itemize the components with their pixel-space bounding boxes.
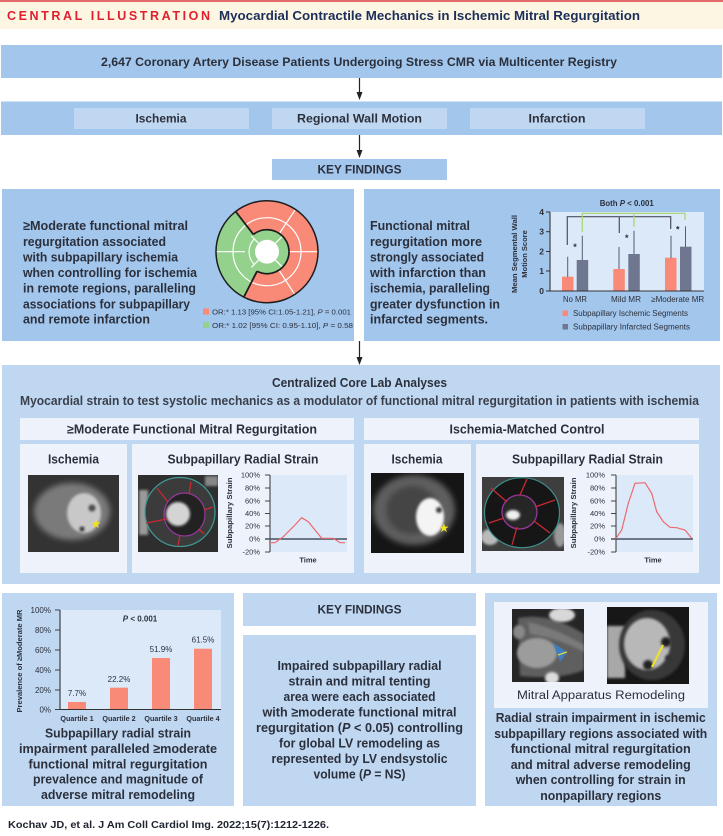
group heading: moderate MR: [20, 418, 354, 440]
legend: odds ratios: OR:* 1.02 [95% CI: 0.95-1.10], P = 0.58: [212, 323, 353, 330]
text block: tenting area: [256, 658, 463, 781]
chart: prevalence bars: 51.9%: [150, 645, 172, 654]
image: long-axis scan with tenting area: [512, 608, 584, 684]
group heading: matched control: [364, 418, 699, 440]
chart: prevalence bars: 0%: [39, 706, 51, 714]
image: strain contours: [481, 477, 566, 551]
text block: infarction finding: ischemia, paralleling: [370, 281, 490, 296]
text block: tenting area: for global LV remodeling as: [279, 735, 440, 750]
chart: wall motion score bars: [510, 199, 704, 304]
text block: infarction finding: [369, 218, 500, 326]
key findings heading: [272, 159, 447, 180]
text block: strain impairment: Subpapillary radial strain: [45, 726, 191, 741]
text block: tenting area: Impaired subpapillary radial: [278, 658, 442, 673]
chart: strain curve, control: Subpapillary Strain: [569, 477, 578, 548]
chart: prevalence bars: P < 0.001: [123, 614, 158, 624]
chart: strain curve, control: [569, 470, 693, 564]
chart: prevalence bars: 60%: [35, 646, 51, 655]
icon: yellow star: ★: [439, 521, 449, 535]
text block: radial strain impairment: functional mitral regurgitation: [511, 741, 691, 756]
text block: radial strain impairment: and mitral adverse remodeling: [511, 757, 691, 772]
chart: wall motion score bars: 0: [539, 286, 544, 296]
measures band: [1, 102, 722, 135]
icon: yellow star: ★: [91, 517, 101, 531]
chart: strain curve, moderate MR: 60%: [245, 496, 260, 506]
image: strain contours: [138, 475, 218, 552]
chart: prevalence bars: 7.7%: [68, 689, 86, 698]
chart: prevalence bars: [15, 606, 221, 723]
chart: wall motion score bars: 2: [539, 246, 544, 256]
panel: mitral apparatus remodeling: [485, 593, 717, 806]
text block: subpapillary ischemia finding: ≥Moderate functional mitral: [23, 218, 188, 233]
text block: subpapillary ischemia finding: [22, 218, 198, 326]
text block: subpapillary ischemia finding: with subpapillary ischemia: [22, 250, 179, 265]
chart: bullseye plot: [216, 201, 318, 303]
text block: radial strain impairment: Radial strain impairment in ischemic: [496, 710, 706, 725]
chart: wall motion score bars: 4: [539, 207, 544, 217]
chart: prevalence bars: Quartile 2: [102, 714, 136, 723]
chart: strain curve, control: 20%: [590, 522, 605, 530]
legend: odds ratios: OR:* 1.13 [95% CI:1.05-1.21], P = 0.001: [212, 310, 351, 316]
chart: strain curve, moderate MR: 40%: [245, 509, 260, 518]
chart: strain curve, moderate MR: 80%: [245, 484, 260, 492]
chart: prevalence bars: 61.5%: [192, 636, 214, 644]
panel: tenting area finding: [243, 635, 476, 806]
chart: strain curve, moderate MR: Subpapillary Strain: [225, 477, 234, 548]
chart: wall motion score bars: No MR: [563, 295, 587, 304]
chart: wall motion score bars: *: [573, 242, 577, 252]
text block: radial strain impairment: when controlling for strain in: [515, 772, 686, 787]
chart: strain curve, control: 60%: [590, 496, 605, 506]
text block: strain impairment: adverse mitral remodeling: [41, 787, 195, 802]
chart: strain curve, control: 40%: [590, 509, 605, 518]
legend: odds ratios: [203, 308, 353, 330]
card: strain, control: [476, 444, 699, 573]
text block: subpapillary ischemia finding: and remote infarction: [23, 311, 150, 326]
text block: tenting area: volume (P = NS): [314, 766, 406, 781]
chart: wall motion score bars: Mean Segmental Wall: [510, 215, 519, 293]
measure: ischemia: Ischemia: [136, 112, 187, 126]
heading: second key findings: [243, 593, 476, 626]
text block: infarction finding: strongly associated: [370, 250, 484, 265]
chart: wall motion score bars: 3: [539, 226, 544, 236]
text block: infarction finding: with infarction than: [369, 265, 486, 280]
text block: tenting area: regurgitation (P < 0.05) controlling: [256, 720, 463, 735]
text block: strain impairment: [19, 726, 217, 802]
chart: wall motion score bars: *: [676, 224, 680, 234]
chart: strain curve, control: Time: [644, 556, 662, 564]
text block: tenting area: represented by LV endsystolic: [272, 751, 448, 766]
chart: prevalence bars: 22.2%: [108, 675, 130, 684]
chart: wall motion score bars: 1: [539, 266, 544, 276]
chart: prevalence bars: Quartile 3: [144, 714, 178, 723]
legend: segment types: [562, 309, 690, 332]
text block: infarction finding: greater dysfunction in: [370, 296, 500, 311]
card: ischemia image, control: [364, 444, 471, 573]
chart: wall motion score bars: *: [625, 233, 629, 243]
text block: infarction finding: infarcted segments.: [370, 311, 488, 326]
text block: subpapillary ischemia finding: in remote regions, paralleling: [23, 281, 196, 296]
card: ischemia image, moderate MR: Ischemia: [48, 452, 100, 466]
legend: segment types: Subpapillary Infarcted Segments: [573, 322, 690, 332]
chart: prevalence bars: 80%: [35, 626, 51, 635]
arrow: measures to key findings: [356, 135, 362, 158]
chart: strain curve, moderate MR: 0%: [249, 534, 260, 544]
text block: subpapillary ischemia finding: associations for subpapillary: [23, 296, 191, 311]
card: ischemia image, moderate MR: [20, 444, 127, 573]
header label: CENTRAL ILLUSTRATION: [7, 9, 210, 23]
chart: prevalence bars: 100%: [31, 606, 51, 615]
chart: wall motion score bars: Motion Score: [520, 230, 529, 278]
key findings heading: KEY FINDINGS: [318, 162, 402, 176]
measure: regional wall motion: [272, 108, 447, 129]
text block: radial strain impairment: [494, 710, 707, 803]
text block: subpapillary ischemia finding: when controlling for ischemia: [22, 265, 198, 280]
legend: segment types: Subpapillary Ischemic Segments: [573, 309, 688, 318]
chart: prevalence bars: Prevalence of ≥Moderate MR: [15, 609, 24, 712]
title: Myocardial Contractile Mechanics in Ischemic Mitral Regurgitation: [219, 8, 640, 23]
chart: strain curve, moderate MR: 20%: [245, 522, 260, 530]
citation: Kochav JD, et al. J Am Coll Cardiol Img. 2022;15(7):1212-1226.: [8, 819, 329, 831]
arrow: cohort to measures: [356, 78, 362, 100]
text block: infarction finding: Functional mitral: [370, 218, 470, 233]
chart: strain curve, control: -20%: [587, 548, 605, 556]
chart: strain curve, moderate MR: 100%: [241, 470, 260, 480]
chart: strain curve, control: 80%: [590, 484, 605, 492]
group heading: moderate MR: ≥Moderate Functional Mitral Regurgitation: [67, 422, 317, 436]
chart: wall motion score bars: ≥Moderate MR: [651, 295, 704, 304]
heading: second key findings: KEY FINDINGS: [318, 602, 402, 616]
text block: tenting area: strain and mitral tenting: [288, 674, 431, 689]
text block: tenting area: area were each associated: [284, 689, 436, 704]
text block: tenting area: with ≥moderate functional mitral: [262, 705, 456, 720]
panel: prevalence by quartile: [2, 593, 234, 806]
subheading: strain aim: Myocardial strain to test systolic mechanics as a modulator of functional mitral regurgitation in patients with ischemia: [20, 394, 700, 408]
card: ischemia image, control: Ischemia: [392, 452, 443, 466]
chart: strain curve, control: 100%: [586, 470, 605, 480]
card: strain, control: Subpapillary Radial Strain: [512, 452, 663, 466]
text block: strain impairment: functional mitral regurgitation: [28, 756, 208, 771]
card: strain, moderate MR: [132, 444, 354, 573]
chart: wall motion score bars: Mild MR: [611, 295, 641, 304]
text block: strain impairment: impairment paralleled ≥moderate: [19, 741, 217, 756]
text block: strain impairment: prevalence and magnitude of: [33, 772, 204, 787]
text block: subpapillary ischemia finding: regurgitation associated: [23, 234, 166, 249]
cohort box: [1, 45, 722, 78]
chart: strain curve, moderate MR: Time: [299, 556, 317, 564]
measure: ischemia: [74, 108, 249, 129]
chart: prevalence bars: Quartile 1: [60, 714, 94, 723]
measure: infarction: [470, 108, 645, 129]
chart: prevalence bars: Quartile 4: [186, 714, 220, 723]
panel: core lab analyses: [2, 365, 720, 584]
chart: prevalence bars: 20%: [35, 686, 51, 695]
cohort box: 2,647 Coronary Artery Disease Patients Undergoing Stress CMR via Multicenter Registry: [101, 55, 617, 69]
header banner: [0, 0, 723, 29]
panel: wall motion: [364, 189, 720, 341]
measure: infarction: Infarction: [528, 112, 586, 126]
chart: strain curve, moderate MR: [225, 470, 347, 564]
card: strain, moderate MR: Subpapillary Radial Strain: [168, 452, 318, 466]
arrow: findings to core lab: [356, 341, 362, 365]
panel: ischemia bullseye: [2, 189, 354, 341]
heading: core lab: Centralized Core Lab Analyses: [272, 376, 447, 390]
text block: radial strain impairment: subpapillary regions associated with: [494, 726, 707, 741]
chart: wall motion score bars: Both P < 0.001: [600, 199, 654, 208]
measure: regional wall motion: Regional Wall Motion: [297, 112, 422, 126]
image caption: Mitral Apparatus Remodeling: [517, 690, 685, 702]
chart: strain curve, control: 0%: [594, 534, 605, 544]
text block: infarction finding: regurgitation more: [370, 234, 482, 249]
group heading: matched control: Ischemia-Matched Control: [450, 422, 604, 436]
chart: strain curve, moderate MR: -20%: [242, 548, 260, 556]
chart: prevalence bars: 40%: [35, 666, 51, 675]
image: short-axis scan with mitral line: [607, 607, 689, 684]
text block: radial strain impairment: nonpapillary regions: [540, 788, 661, 803]
